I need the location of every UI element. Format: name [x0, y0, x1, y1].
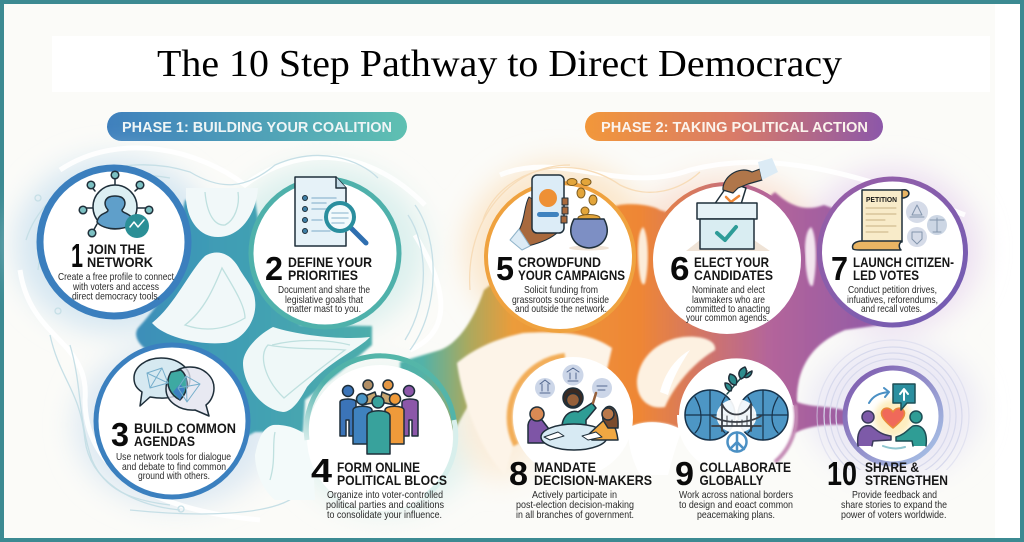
- step 10 text: STRENGTHEN: [865, 472, 948, 488]
- step 10 text: 10: [827, 455, 857, 492]
- step 1: join the network: [40, 168, 188, 316]
- step 3 text: ground with others.: [138, 470, 210, 482]
- step 6 text: 6: [670, 250, 690, 287]
- step 6 text: your common agends.: [686, 312, 769, 324]
- step 2 text: legislative goals that: [285, 294, 363, 306]
- step 6 text: committed to anacting: [686, 303, 770, 315]
- icon: phone, coins and pot: [510, 175, 609, 250]
- step 3 text: Use network tools for dialogue: [116, 451, 231, 463]
- step 10 text: power of voters worldwide.: [841, 509, 946, 521]
- step 7 text: Conduct petition drives,: [848, 284, 937, 296]
- icon: ballot box with hand: [686, 158, 778, 251]
- step 3 text: BUILD COMMON: [134, 420, 236, 436]
- step 10 text: [827, 455, 948, 521]
- step 4 text: [311, 452, 447, 521]
- step 10 text: share stories to expand the: [841, 499, 947, 511]
- phase 2 banner: [585, 112, 883, 141]
- step 5 text: grassroots sources inside: [512, 294, 609, 306]
- icon: group of people: [340, 380, 418, 454]
- step 8: mandate decision-makers: [509, 356, 652, 521]
- step 9 text: GLOBALLY: [700, 472, 764, 488]
- icon: globes, bridge, olive branch and peace sign: [685, 367, 788, 452]
- step 8 text: Actively participate in: [532, 489, 617, 501]
- step 2 text: DEFINE YOUR: [288, 254, 372, 270]
- step 6 text: Nominate and elect: [692, 284, 765, 296]
- step 3 text: and debate to find common: [122, 461, 226, 473]
- step 3 text: AGENDAS: [134, 433, 195, 449]
- step 2 text: [265, 250, 372, 315]
- step 7 text: [831, 250, 954, 315]
- step 7 text: LAUNCH CITIZEN-: [853, 254, 954, 270]
- connecting river bands: [136, 192, 955, 440]
- step 6: elect your candidates: [651, 158, 803, 336]
- step 1 text: JOIN THE: [87, 241, 145, 257]
- step 5 text: CROWDFUND: [518, 254, 601, 270]
- step 9 text: COLLABORATE: [700, 459, 791, 475]
- step 9 text: to design and eoact common: [679, 499, 793, 511]
- step 3 text: 3: [111, 416, 129, 453]
- step 2 text: Document and share the: [278, 284, 370, 296]
- step 1 text: NETWORK: [87, 254, 153, 270]
- step 5 text: [496, 250, 625, 315]
- step 6 text: ELECT YOUR: [694, 254, 769, 270]
- step 1 text: 1: [71, 237, 83, 274]
- step 1 text: with voters and access: [72, 281, 159, 293]
- step 5: crowdfund your campaigns: [486, 175, 634, 331]
- step 10 text: Provide feedback and: [852, 489, 937, 501]
- step 2 text: 2: [265, 250, 283, 287]
- step 9: collaborate globally: [675, 356, 796, 521]
- icon: petition scroll: [853, 190, 947, 250]
- step 4 text: POLITICAL BLOCS: [337, 472, 447, 488]
- icon: document with magnifier: [295, 177, 366, 246]
- step 10: share and strengthen: [817, 340, 969, 521]
- step 9 text: [675, 455, 793, 521]
- step 9 text: peacemaking plans.: [697, 509, 775, 521]
- icon: people sharing a heart: [858, 384, 926, 448]
- step 7 text: 7: [831, 250, 848, 287]
- step 4 text: to consolidate your influence.: [327, 509, 442, 521]
- step 1 text: Create a free profile to connect: [58, 271, 174, 283]
- step 6 text: lawmakers who are: [692, 294, 765, 306]
- step 9 text: Work across national borders: [679, 489, 793, 501]
- step 5 text: and outside the network.: [515, 303, 607, 315]
- step 3: build common agendas: [96, 345, 248, 497]
- phase 2 banner: PHASE 2: TAKING POLITICAL ACTION: [601, 120, 868, 136]
- step 1 text: direct democracy tools.: [72, 290, 160, 302]
- phase 1 banner: [107, 112, 407, 141]
- step 2 text: PRIORITIES: [288, 267, 358, 283]
- step 7 text: and recall votes.: [861, 303, 922, 315]
- step 10 text: SHARE &: [865, 459, 919, 475]
- step 5 text: Solicit funding from: [524, 284, 598, 296]
- step 7 text: infuatives, reforendums,: [847, 294, 938, 306]
- icon: petition scroll: PETITION: [866, 195, 897, 204]
- step 8 text: MANDATE: [534, 459, 596, 475]
- phase 1 banner: PHASE 1: BUILDING YOUR COALITION: [122, 120, 392, 136]
- icon: network profile: [79, 171, 153, 238]
- step 8 text: post-election decision-making: [516, 499, 634, 511]
- icon: people around a table: [528, 364, 618, 450]
- step 3 text: [111, 416, 236, 482]
- step 7 text: LED VOTES: [853, 267, 919, 283]
- step 5 text: 5: [496, 250, 514, 287]
- step 8 text: DECISION-MAKERS: [534, 472, 652, 488]
- step 9 text: 9: [675, 455, 694, 492]
- step 5 text: YOUR CAMPAIGNS: [518, 267, 625, 283]
- step 4 text: Organize into voter-controlled: [327, 489, 443, 501]
- step 1 text: [58, 237, 174, 302]
- step 8 text: 8: [509, 455, 528, 492]
- pale hollows between the steps: [152, 188, 816, 500]
- step 2: define your priorities: [251, 177, 399, 327]
- step 4 text: FORM ONLINE: [337, 459, 420, 475]
- icon: overlapping speech bubbles: [134, 358, 214, 416]
- step 6 text: CANDIDATES: [694, 267, 773, 283]
- step 7: launch citizen-led votes: [820, 179, 966, 325]
- step 4: form online political blocs: [306, 356, 456, 521]
- step 6 text: [670, 250, 773, 324]
- step 8 text: [509, 455, 652, 521]
- step 4 text: political parties and coalitions: [326, 499, 444, 511]
- step 2 text: matter mast to you.: [287, 303, 361, 315]
- title: The 10 Step Pathway to Direct Democracy: [157, 43, 842, 85]
- step 4 text: 4: [311, 452, 333, 489]
- step 8 text: in all branches of government.: [516, 509, 634, 521]
- soft background washes: [15, 148, 980, 520]
